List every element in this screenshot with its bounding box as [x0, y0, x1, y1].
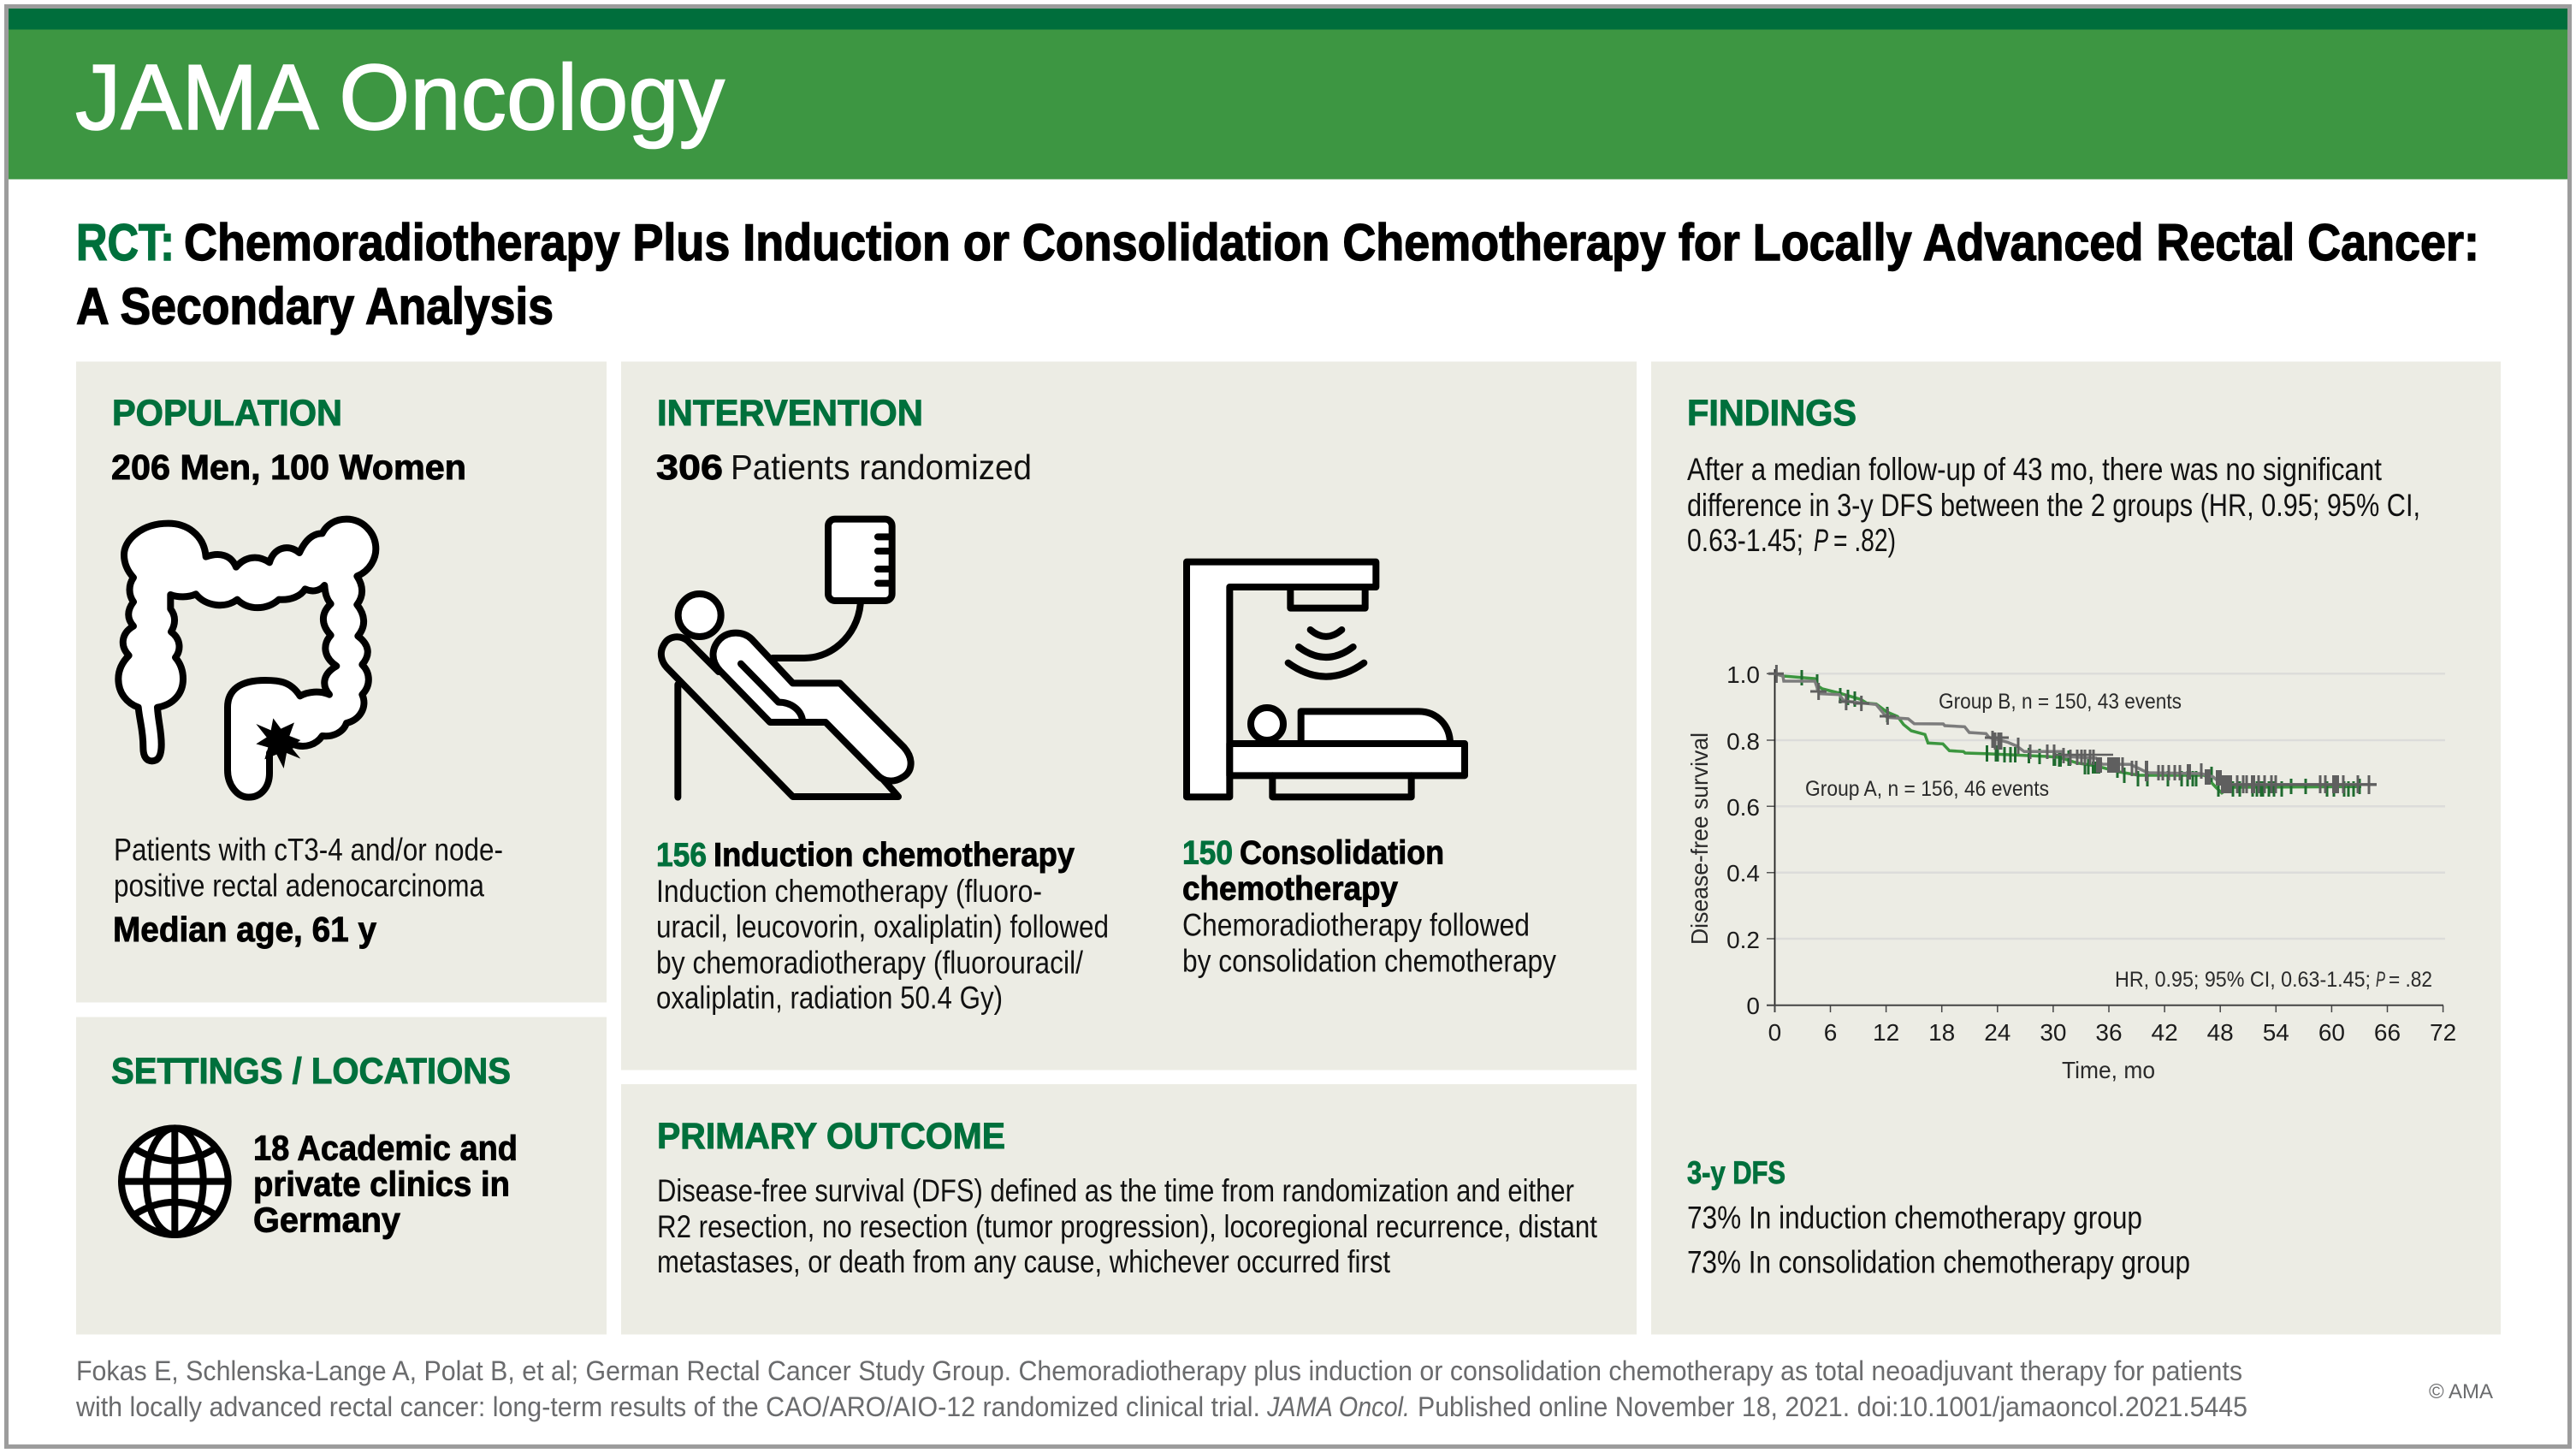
- heading: findings: FINDINGS: [1687, 393, 1856, 434]
- settings text: private clinics in: [253, 1164, 510, 1203]
- x-axis tick labels: [1768, 1019, 2456, 1046]
- arm: consolidation chemotherapy: Consolidation: [1240, 835, 1444, 871]
- y-axis tick labels: 0: [1746, 993, 1760, 1019]
- x-axis tick labels: 6: [1824, 1019, 1837, 1046]
- curve: group A (green): [1775, 670, 2361, 797]
- copyright: © AMA: [2429, 1380, 2493, 1403]
- settings text: [253, 1128, 518, 1239]
- x-axis tick labels: 24: [1984, 1019, 2010, 1046]
- citation footer: with locally advanced rectal cancer: long-term results of the CAO/ARO/AIO-12 randomized clinical trial.: [75, 1391, 1260, 1422]
- x-axis tick labels: 54: [2263, 1019, 2289, 1046]
- arm: consolidation chemotherapy: Chemoradiotherapy followed: [1182, 907, 1530, 943]
- arm: induction chemotherapy: Induction chemotherapy: [714, 837, 1075, 874]
- findings summary: difference in 3-y DFS between the 2 groups (HR, 0.95; 95% CI,: [1687, 488, 2420, 523]
- 3-year DFS results: [1687, 1155, 2190, 1280]
- median age: Median age, 61 y: [113, 910, 376, 949]
- panel: settings and locations: [76, 1017, 607, 1335]
- annotation: hazard ratio: HR, 0.95; 95% CI, 0.63-1.45;: [2115, 968, 2371, 992]
- arm: induction chemotherapy: by chemoradiotherapy (fluorouracil/: [656, 945, 1084, 981]
- x-axis tick labels: 12: [1873, 1019, 1899, 1046]
- citation footer: Fokas E, Schlenska-Lange A, Polat B, et al; German Rectal Cancer Study Group. Chemoradiotherapy plus induction or consolidation chemotherapy as total neoadjuvant therapy for patients: [76, 1355, 2242, 1386]
- icon: radiotherapy machine: [1187, 562, 1465, 797]
- y-axis title: Disease-free survival: [1686, 732, 1713, 945]
- citation footer: JAMA Oncol.: [1266, 1391, 1410, 1422]
- title: [76, 214, 2479, 335]
- heading: primary outcome: PRIMARY OUTCOME: [657, 1116, 1005, 1157]
- title: A Secondary Analysis: [76, 277, 554, 335]
- x-axis tick labels: 72: [2430, 1019, 2456, 1046]
- citation footer: [75, 1355, 2247, 1422]
- icon: infusion chair: [661, 519, 911, 798]
- x-axis tick labels: 66: [2374, 1019, 2401, 1046]
- annotation: hazard ratio: = .82: [2389, 968, 2432, 992]
- y-axis tick labels: 0.6: [1726, 794, 1760, 821]
- y-axis tick labels: [1726, 661, 1760, 1019]
- arm: induction chemotherapy: oxaliplatin, radiation 50.4 Gy): [656, 981, 1003, 1015]
- heading: settings: SETTINGS / LOCATIONS: [111, 1051, 511, 1092]
- heading: population: POPULATION: [112, 393, 342, 434]
- arm: consolidation chemotherapy: 150: [1182, 835, 1233, 871]
- x-axis tick labels: 60: [2318, 1019, 2345, 1046]
- patients randomized: Patients randomized: [731, 448, 1032, 487]
- header banner: [9, 9, 2567, 180]
- panel: population: [76, 361, 607, 1003]
- population description: Patients with cT3-4 and/or node-: [114, 832, 503, 868]
- arm: consolidation chemotherapy: [1182, 835, 1556, 979]
- findings summary: After a median follow-up of 43 mo, there was no significant: [1687, 452, 2383, 487]
- outcome description: R2 resection, no resection (tumor progression), locoregional recurrence, distant: [657, 1209, 1598, 1244]
- annotation: hazard ratio: P: [2376, 968, 2385, 992]
- arm: induction chemotherapy: 156: [656, 837, 707, 874]
- y-axis tick labels: 0.8: [1726, 728, 1760, 755]
- y-axis tick labels: 0.2: [1726, 927, 1760, 953]
- curve: group B (gray): [1768, 665, 2377, 794]
- y-axis tick labels: 0.4: [1726, 860, 1760, 887]
- patients randomized: 306: [656, 448, 723, 487]
- label: group A: Group A, n = 156, 46 events: [1805, 777, 2049, 801]
- outcome description: Disease-free survival (DFS) defined as the time from randomization and either: [657, 1173, 1574, 1208]
- y-axis tick labels: 1.0: [1726, 661, 1760, 688]
- findings summary: = .82): [1833, 523, 1896, 558]
- x-axis tick labels: 36: [2095, 1019, 2123, 1046]
- panel: intervention: [621, 361, 1637, 1070]
- outcome description: metastases, or death from any cause, whichever occurred first: [657, 1244, 1391, 1279]
- findings summary: 0.63-1.45;: [1687, 523, 1803, 558]
- 3-year DFS results: 73% In induction chemotherapy group: [1687, 1200, 2142, 1236]
- label: group B: Group B, n = 150, 43 events: [1939, 690, 2182, 714]
- x-axis tick labels: 42: [2152, 1019, 2178, 1046]
- arm: induction chemotherapy: uracil, leucovorin, oxaliplatin) followed: [656, 909, 1109, 945]
- chart: Kaplan-Meier disease-free survival: [1686, 661, 2456, 1083]
- findings summary: P: [1814, 523, 1828, 558]
- 3-year DFS results: 73% In consolidation chemotherapy group: [1687, 1244, 2190, 1280]
- x-axis title: Time, mo: [2062, 1057, 2155, 1083]
- settings text: Germany: [253, 1200, 400, 1239]
- population counts: 206 Men, 100 Women: [111, 448, 466, 487]
- settings text: 18 Academic and: [253, 1128, 518, 1167]
- population description: [114, 832, 503, 904]
- arm: consolidation chemotherapy: by consolidation chemotherapy: [1182, 943, 1556, 979]
- arm: induction chemotherapy: Induction chemotherapy (fluoro-: [656, 874, 1042, 909]
- journal name: JAMA Oncology: [75, 45, 725, 150]
- panel: primary outcome: [621, 1084, 1637, 1335]
- arm: consolidation chemotherapy: chemotherapy: [1182, 871, 1398, 907]
- x-axis tick labels: 18: [1928, 1019, 1955, 1046]
- population description: positive rectal adenocarcinoma: [114, 868, 484, 904]
- icon: globe: [121, 1128, 228, 1235]
- heading: intervention: INTERVENTION: [657, 393, 923, 434]
- icon: colon with tumor: [118, 519, 376, 798]
- citation footer: Published online November 18, 2021. doi:10.1001/jamaoncol.2021.5445: [1418, 1391, 2247, 1422]
- panel: findings: [1651, 361, 2501, 1335]
- outcome description: [657, 1173, 1598, 1279]
- title: RCT:: [76, 214, 175, 271]
- findings summary: [1687, 452, 2420, 558]
- arm: induction chemotherapy: [656, 837, 1109, 1015]
- x-axis tick labels: 48: [2207, 1019, 2234, 1046]
- 3-year DFS results: 3-y DFS: [1687, 1155, 1785, 1190]
- x-axis tick labels: 30: [2040, 1019, 2066, 1046]
- x-axis tick labels: 0: [1768, 1019, 1781, 1046]
